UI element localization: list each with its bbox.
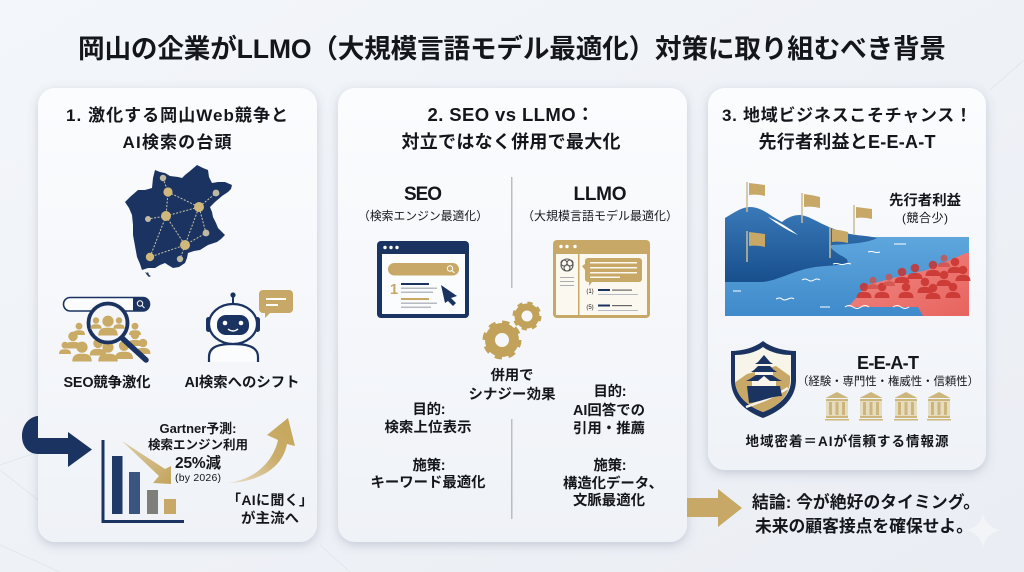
icon: four pillars [825, 392, 951, 420]
icon: speech bubble [259, 290, 293, 318]
text: first mover advantage: 先行者利益 [889, 192, 962, 209]
label: shift to AI search: AI検索へのシフト [184, 374, 300, 391]
panel 3 heading: 先行者利益とE-E-A-T [758, 132, 936, 152]
SEO heading [358, 184, 488, 223]
panel: competition and AI search [38, 88, 317, 542]
text: Gartner forecast [148, 421, 248, 484]
panel 3 heading [722, 105, 972, 152]
icon: LLMO browser: (5) [586, 305, 594, 311]
text: asking AI becomes mainstream: が主流へ [241, 509, 299, 527]
icon: search crowd [59, 297, 150, 362]
panel 2 heading: 2. SEO vs LLMO： [428, 104, 594, 125]
text: E-E-A-T [797, 353, 979, 388]
icon: gears [485, 304, 540, 357]
text: E-E-A-T: （経験・専門性・権威性・信頼性） [797, 374, 979, 388]
icon: LLMO browser: (1) [586, 289, 594, 295]
text: synergy: 併用で [490, 366, 534, 384]
SEO heading: SEO [404, 184, 442, 205]
text: LLMO purpose and measures: 構造化データ、 [563, 474, 663, 492]
text: synergy: シナジー効果 [468, 386, 556, 403]
text: SEO purpose and measures: キーワード最適化 [370, 473, 486, 491]
panel 2 heading [402, 104, 620, 152]
icon: SEO browser: 1 [390, 281, 398, 298]
label: SEO competition: SEO競争激化 [64, 374, 151, 391]
panel 1 heading: 1. 激化する岡山Web競争と [66, 105, 288, 125]
icon: castle shield [731, 341, 796, 418]
arrow: rising curve [228, 418, 295, 483]
text: LLMO purpose and measures: AI回答での [573, 401, 645, 419]
text: local trust: 地域密着＝AIが信頼する情報源 [746, 433, 949, 449]
illustration: blue ocean and red ocean [725, 182, 970, 316]
LLMO heading: （大規模言語モデル最適化） [522, 208, 678, 223]
text: Gartner forecast: 25%減 [175, 454, 221, 472]
text: SEO purpose and measures [370, 400, 486, 491]
text: SEO purpose and measures: 目的: [412, 400, 446, 418]
title: 岡山の企業がLLMO（大規模言語モデル最適化）対策に取り組むべき背景 [78, 34, 946, 64]
LLMO heading [522, 184, 678, 223]
text: conclusion [752, 492, 980, 536]
text: conclusion: 結論: 今が絶好のタイミング。 [752, 492, 980, 512]
SEO heading: （検索エンジン最適化） [358, 209, 488, 223]
arrow: navy bent arrow [22, 416, 92, 467]
panel: local business opportunity [708, 88, 986, 470]
center dividers [511, 177, 512, 519]
text: LLMO purpose and measures [563, 382, 663, 509]
panel 1 heading [66, 105, 288, 152]
panel 2 heading: 対立ではなく併用で最大化 [402, 132, 620, 152]
icon: Okayama network map [125, 165, 232, 277]
icon: SEO browser [377, 241, 469, 318]
text: Gartner forecast: (by 2026) [175, 472, 221, 484]
text: asking AI becomes mainstream [227, 492, 313, 527]
icon: LLMO browser [553, 240, 650, 318]
text: LLMO purpose and measures: 文脈最適化 [573, 491, 646, 509]
text: SEO purpose and measures: 検索上位表示 [384, 418, 472, 436]
text: Gartner forecast: 検索エンジン利用 [148, 437, 248, 452]
text: LLMO purpose and measures: 引用・推薦 [573, 419, 645, 437]
text: LLMO purpose and measures: 施策: [594, 456, 626, 474]
text: asking AI becomes mainstream: 「AIに聞く」 [227, 492, 313, 508]
LLMO heading: LLMO [574, 184, 626, 205]
text: first mover advantage: (競合少) [902, 211, 948, 225]
text: E-E-A-T: E-E-A-T [857, 353, 919, 373]
panel 3 heading: 3. 地域ビジネスこそチャンス！ [722, 105, 972, 125]
text: conclusion: 未来の顧客接点を確保せよ。 [755, 516, 973, 536]
panel: SEO vs LLMO [338, 88, 687, 542]
icon: AI robot [206, 292, 260, 362]
text: Gartner forecast: Gartner予測: [160, 421, 236, 436]
panel 1 heading: AI検索の台頭 [122, 132, 232, 152]
text: SEO purpose and measures: 施策: [412, 456, 446, 474]
arrow: conclusion [687, 489, 742, 527]
text: synergy [468, 366, 556, 403]
arrow: declining trend [122, 441, 171, 484]
text: LLMO purpose and measures: 目的: [594, 382, 626, 400]
bar chart [103, 440, 184, 522]
text: first mover advantage [889, 192, 962, 225]
